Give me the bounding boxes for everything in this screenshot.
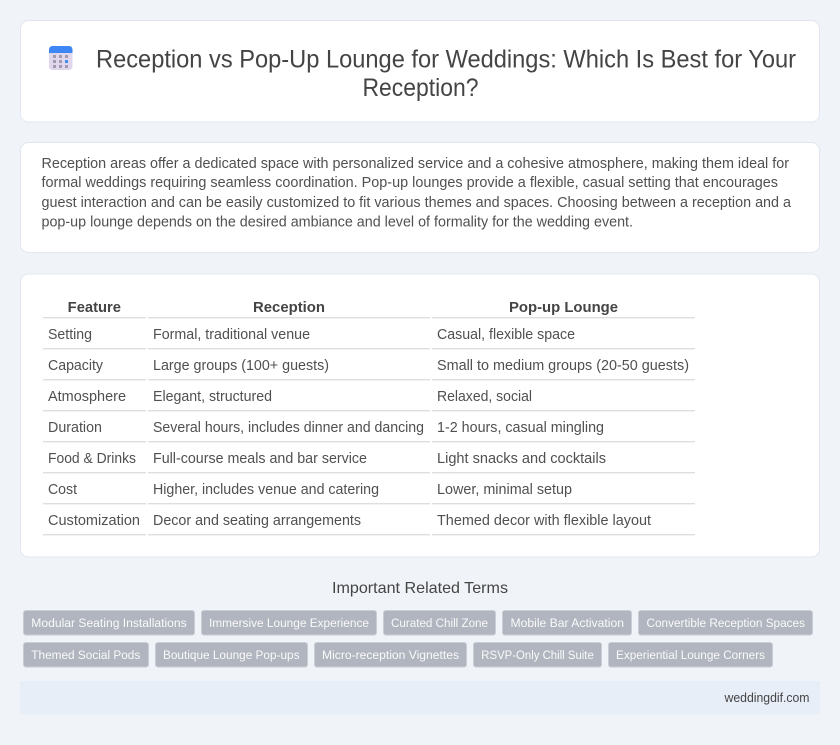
related term tags: [24, 610, 812, 667]
table header row: [68, 300, 618, 316]
row: cost: Higher, includes venue and catering: [153, 482, 379, 498]
row: food and drinks: Full-course meals and bar service: [153, 451, 367, 467]
title: [96, 46, 796, 102]
intro paragraph: guest interaction and can be easily customized to fit various themes and spaces. Choosing between a reception and a: [42, 195, 791, 211]
row: food and drinks: [48, 451, 606, 467]
tag: themed social pods: Themed Social Pods: [31, 648, 140, 662]
row: setting: [48, 327, 575, 343]
tag: modular seating installations: Modular Seating Installations: [31, 616, 187, 630]
row: capacity: Large groups (100+ guests): [153, 358, 329, 374]
row: setting: Setting: [48, 327, 92, 343]
title: Reception vs Pop-Up Lounge for Weddings: Which Is Best for Your: [96, 46, 796, 74]
panel: header: [20, 20, 820, 122]
row: customization: Decor and seating arrangements: [153, 513, 361, 529]
panel: comparison table: [20, 274, 820, 557]
tag: micro-reception vignettes: Micro-reception Vignettes: [322, 648, 459, 662]
tag: boutique lounge pop-ups: Boutique Lounge Pop-ups: [163, 648, 300, 662]
row: atmosphere: Relaxed, social: [437, 389, 532, 405]
intro paragraph: Reception areas offer a dedicated space with personalized service and a cohesive atmosphere, making them ideal for: [42, 156, 789, 172]
row: customization: Themed decor with flexible layout: [437, 513, 651, 529]
table header row: Pop-up Lounge: [509, 300, 618, 316]
row: food and drinks: Light snacks and cocktails: [437, 451, 606, 467]
tag: micro-reception vignettes: [314, 642, 466, 667]
row: setting: Casual, flexible space: [437, 327, 575, 343]
row: duration: Several hours, includes dinner and dancing: [153, 420, 424, 436]
tag: rsvp-only chill suite: RSVP-Only Chill Suite: [481, 648, 594, 662]
tag: curated chill zone: Curated Chill Zone: [391, 616, 488, 630]
intro paragraph: formal weddings requiring seamless coordination. Pop-up lounges provide a flexible, casual setting that encourages: [42, 175, 778, 191]
tag: convertible reception spaces: Convertible Reception Spaces: [646, 616, 805, 630]
row: duration: [48, 420, 604, 436]
footer bar: weddingdif.com: [724, 690, 810, 705]
table header row: Feature: [68, 300, 121, 316]
row: setting: Formal, traditional venue: [153, 327, 310, 343]
row: capacity: Capacity: [48, 358, 104, 374]
tag: modular seating installations: [24, 610, 194, 635]
tag: experiential lounge corners: [608, 642, 772, 667]
row: cost: [48, 482, 572, 498]
intro paragraph: pop-up lounge depends on the desired ambiance and level of formality for the wedding event.: [42, 214, 633, 230]
row: duration: Duration: [48, 420, 102, 436]
tag: immersive lounge experience: Immersive Lounge Experience: [209, 616, 369, 630]
tag: immersive lounge experience: [202, 610, 376, 635]
row: atmosphere: [48, 389, 532, 405]
row: customization: Customization: [48, 513, 140, 529]
tag: boutique lounge pop-ups: [156, 642, 308, 667]
row: atmosphere: Atmosphere: [48, 389, 126, 405]
tag: themed social pods: [24, 642, 148, 667]
row: customization: [48, 513, 651, 529]
row: capacity: [48, 358, 689, 374]
tag: rsvp-only chill suite: [474, 642, 602, 667]
tag: experiential lounge corners: Experiential Lounge Corners: [616, 648, 765, 662]
tag: convertible reception spaces: [638, 610, 812, 635]
row: capacity: Small to medium groups (20-50 guests): [437, 358, 689, 374]
footer bar: [20, 681, 820, 714]
row: food and drinks: Food & Drinks: [48, 451, 136, 467]
icon: calendar: [49, 46, 72, 70]
row: cost: Cost: [48, 482, 77, 498]
row: cost: Lower, minimal setup: [437, 482, 572, 498]
row: duration: 1-2 hours, casual mingling: [437, 420, 604, 436]
row: atmosphere: Elegant, structured: [153, 389, 272, 405]
panel: introduction: [20, 142, 820, 252]
heading: important related terms: Important Related Terms: [332, 580, 508, 597]
title: Reception?: [362, 74, 478, 102]
tag: curated chill zone: [384, 610, 496, 635]
tag: mobile bar activation: Mobile Bar Activation: [510, 616, 624, 630]
intro paragraph: [42, 156, 791, 230]
table header row: Reception: [253, 300, 325, 316]
tag: mobile bar activation: [502, 610, 632, 635]
